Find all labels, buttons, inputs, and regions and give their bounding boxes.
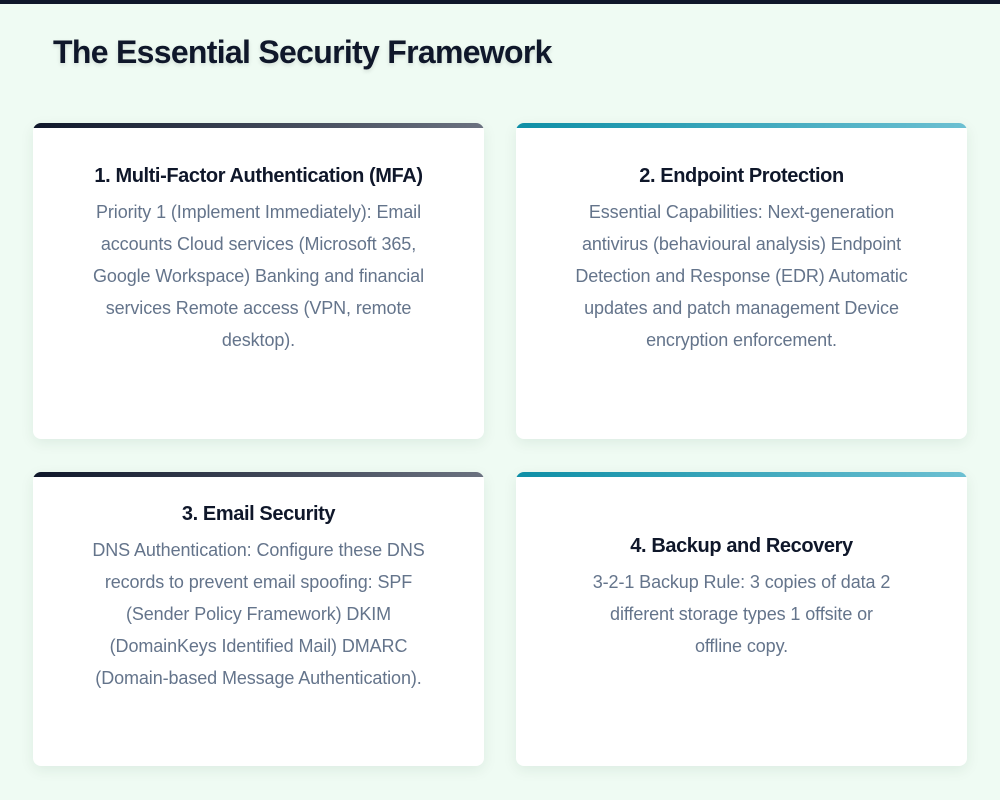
- text: Backup: 3-2-1 Backup Rule: 3 copies of data 2: [593, 572, 890, 592]
- text: MFA: accounts Cloud services (Microsoft 365,: [101, 234, 416, 254]
- text: Email: 3. Email Security: [182, 503, 335, 525]
- panel: Email Security: [33, 472, 484, 766]
- panel: Endpoint Protection: [516, 123, 967, 439]
- text: Endpoint: encryption enforcement.: [646, 330, 837, 350]
- text: Email: records to prevent email spoofing: SPF: [105, 572, 412, 592]
- text: Backup: offline copy.: [695, 636, 788, 656]
- text: Endpoint: Detection and Response (EDR) Automatic: [575, 266, 908, 286]
- text: Email: (Sender Policy Framework) DKIM: [126, 604, 391, 624]
- text: Endpoint: Essential Capabilities: Next-generation: [589, 202, 894, 222]
- text: Email: (DomainKeys Identified Mail) DMARC: [110, 636, 407, 656]
- text: MFA: Priority 1 (Implement Immediately): Email: [96, 202, 421, 222]
- text: Endpoint: antivirus (behavioural analysis) Endpoint: [582, 234, 901, 254]
- text: Endpoint: 2. Endpoint Protection: [639, 165, 844, 187]
- text: Email: DNS Authentication: Configure these DNS: [92, 540, 425, 560]
- text: MFA: services Remote access (VPN, remote: [106, 298, 411, 318]
- title: The Essential Security Framework: [53, 34, 552, 70]
- text: Backup: [593, 535, 890, 656]
- text: Endpoint: updates and patch management Device: [584, 298, 899, 318]
- text: Endpoint: [575, 165, 908, 350]
- text: MFA: desktop).: [222, 330, 295, 350]
- text: Email: (Domain-based Message Authentication).: [95, 668, 422, 688]
- text: Backup: 4. Backup and Recovery: [630, 535, 853, 557]
- text: MFA: [93, 165, 424, 350]
- text: Backup: different storage types 1 offsite or: [610, 604, 873, 624]
- panel: MFA: [33, 123, 484, 439]
- text: MFA: Google Workspace) Banking and financial: [93, 266, 424, 286]
- text: Email: [92, 503, 425, 688]
- panel: Backup and Recovery: [516, 472, 967, 766]
- text: MFA: 1. Multi-Factor Authentication (MFA): [94, 165, 423, 187]
